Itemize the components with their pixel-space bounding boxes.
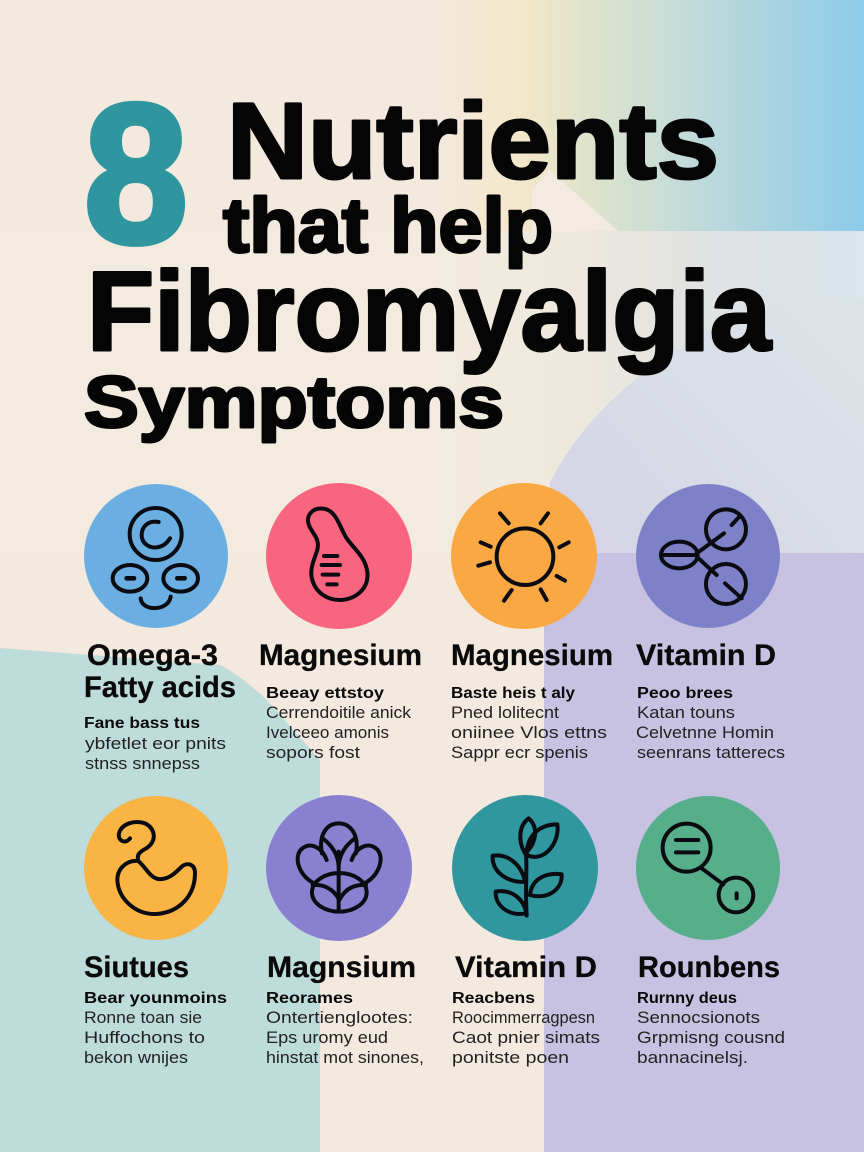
description: Caot pnier simats bbox=[452, 1028, 600, 1047]
big number 8: 8 bbox=[84, 63, 188, 284]
description: bannacinelsj. bbox=[637, 1048, 748, 1067]
icon: lotus bbox=[266, 795, 412, 941]
description: ponitste poen bbox=[452, 1048, 569, 1067]
heading: Fatty acids bbox=[84, 671, 236, 704]
description bbox=[636, 685, 785, 762]
description: Ronne toan sie bbox=[84, 1008, 202, 1027]
heading: Siutues bbox=[84, 951, 189, 984]
title line: Symptoms: Symptoms bbox=[84, 363, 504, 443]
description: Peoo brees bbox=[637, 685, 733, 702]
description: Reacbens bbox=[452, 990, 535, 1007]
description bbox=[452, 990, 600, 1067]
heading: Magnsium bbox=[267, 951, 416, 984]
panel: vitamin D 2 bbox=[452, 795, 600, 1067]
description: seenrans tatterecs bbox=[637, 743, 785, 762]
description: Ontertienglootes: bbox=[266, 1008, 413, 1027]
icon: linked circles bbox=[636, 796, 780, 940]
description: sopors fost bbox=[266, 743, 360, 762]
description: Ivelceeo amonis bbox=[266, 723, 389, 742]
icon: pear-shaped organ bbox=[266, 483, 412, 629]
icon: hook and bean bbox=[84, 796, 228, 940]
description: Beeay ettstoy bbox=[266, 685, 384, 702]
description: Reorames bbox=[266, 990, 353, 1007]
description: Rurnny deus bbox=[637, 990, 737, 1007]
heading: Magnesium bbox=[259, 639, 422, 672]
panel: magnesium 2 bbox=[451, 483, 613, 762]
description: bekon wnijes bbox=[84, 1048, 188, 1067]
icon: omega-3 circle bbox=[84, 484, 228, 628]
panel: magnsium bbox=[266, 795, 424, 1067]
description: Sappr ecr spenis bbox=[451, 743, 588, 762]
description: Katan touns bbox=[637, 703, 735, 722]
heading: Vitamin D bbox=[455, 951, 597, 984]
description: Bear younmoins bbox=[84, 990, 227, 1007]
panel: magnesium 1 bbox=[259, 483, 422, 762]
title bbox=[84, 63, 772, 443]
description: Pned lolitecnt bbox=[451, 703, 559, 722]
title line: Fibromyalgia: Fibromyalgia bbox=[87, 249, 772, 374]
description: Baste heis t aly bbox=[451, 685, 575, 702]
icon: molecule leaves bbox=[636, 484, 780, 628]
description: stnss snnepss bbox=[85, 754, 200, 773]
panel: siutues bbox=[84, 796, 228, 1067]
heading: Vitamin D bbox=[636, 639, 776, 672]
description: Cerrendoitile anick bbox=[266, 703, 412, 722]
icon: sun bbox=[451, 483, 597, 629]
panel: omega-3 bbox=[84, 484, 236, 773]
description bbox=[266, 685, 412, 762]
description: Eps uromy eud bbox=[266, 1028, 388, 1047]
heading: Rounbens bbox=[638, 951, 780, 984]
description: oniinee Vlos ettns bbox=[451, 723, 607, 742]
panel: rounbens bbox=[636, 796, 785, 1067]
description: hinstat mot sinones, bbox=[266, 1048, 424, 1067]
description bbox=[637, 990, 785, 1067]
description: Celvetnne Homin bbox=[636, 723, 774, 742]
description: Grpmisng cousnd bbox=[637, 1028, 785, 1047]
heading: Magnesium bbox=[451, 639, 613, 672]
description: ybfetlet eor pnits bbox=[85, 734, 226, 753]
heading: Omega-3 bbox=[87, 639, 218, 672]
description: Roocimmerragpesn bbox=[452, 1008, 595, 1027]
icon: plant sprig bbox=[452, 795, 598, 941]
description bbox=[84, 715, 226, 773]
title line: that help: that help bbox=[223, 183, 553, 269]
description bbox=[266, 990, 424, 1067]
description bbox=[84, 990, 227, 1067]
heading bbox=[84, 639, 236, 704]
description: Fane bass tus bbox=[84, 715, 200, 732]
description: Sennocsionots bbox=[637, 1008, 760, 1027]
panel: vitamin D 1 bbox=[636, 484, 785, 762]
description: Huffochons to bbox=[84, 1028, 205, 1047]
description bbox=[451, 685, 607, 762]
title line: Nutrients: Nutrients bbox=[227, 80, 719, 201]
